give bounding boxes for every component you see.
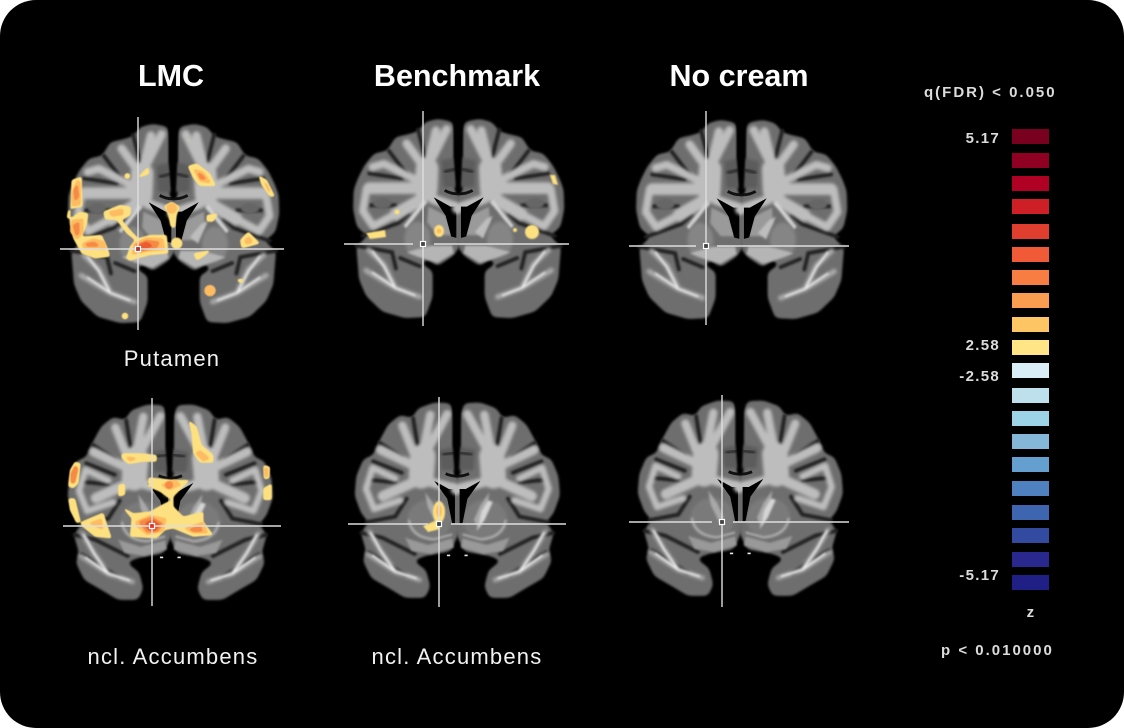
brain scan: Benchmark putamen: [344, 111, 569, 326]
label: ncl. Accumbens Benchmark: ncl. Accumbens: [372, 644, 542, 669]
legend threshold: p: p < 0.010000: [941, 642, 1054, 659]
brain scan: Benchmark nucleus accumbens: [348, 397, 566, 607]
legend value 2.58: 2.58: [966, 337, 1000, 354]
crosshair: [629, 111, 849, 325]
crosshair: [60, 117, 284, 330]
label: Putamen: Putamen: [124, 346, 220, 371]
crosshair: [63, 398, 281, 606]
label: ncl. Accumbens LMC: ncl. Accumbens: [88, 644, 258, 669]
heading: No cream: No cream: [669, 59, 809, 93]
heading: LMC: LMC: [138, 59, 204, 93]
legend: colour scale: [924, 84, 1057, 659]
brain scan: No cream putamen: [629, 111, 849, 325]
brain scan: LMC nucleus accumbens: [63, 398, 281, 606]
heading: Benchmark: Benchmark: [374, 59, 540, 93]
brain scan: No cream nucleus accumbens: [629, 395, 849, 607]
legend value -5.17: -5.17: [959, 567, 1000, 584]
crosshair: [348, 397, 566, 607]
brain scan: LMC putamen: [60, 117, 284, 330]
legend value -2.58: -2.58: [959, 368, 1000, 385]
legend value 5.17: 5.17: [966, 130, 1000, 147]
legend threshold: q(FDR): q(FDR) < 0.050: [924, 84, 1057, 101]
crosshair: [344, 111, 569, 326]
legend swatches: [1012, 129, 1049, 590]
crosshair: [629, 395, 849, 607]
legend axis: z: z: [1027, 604, 1035, 621]
